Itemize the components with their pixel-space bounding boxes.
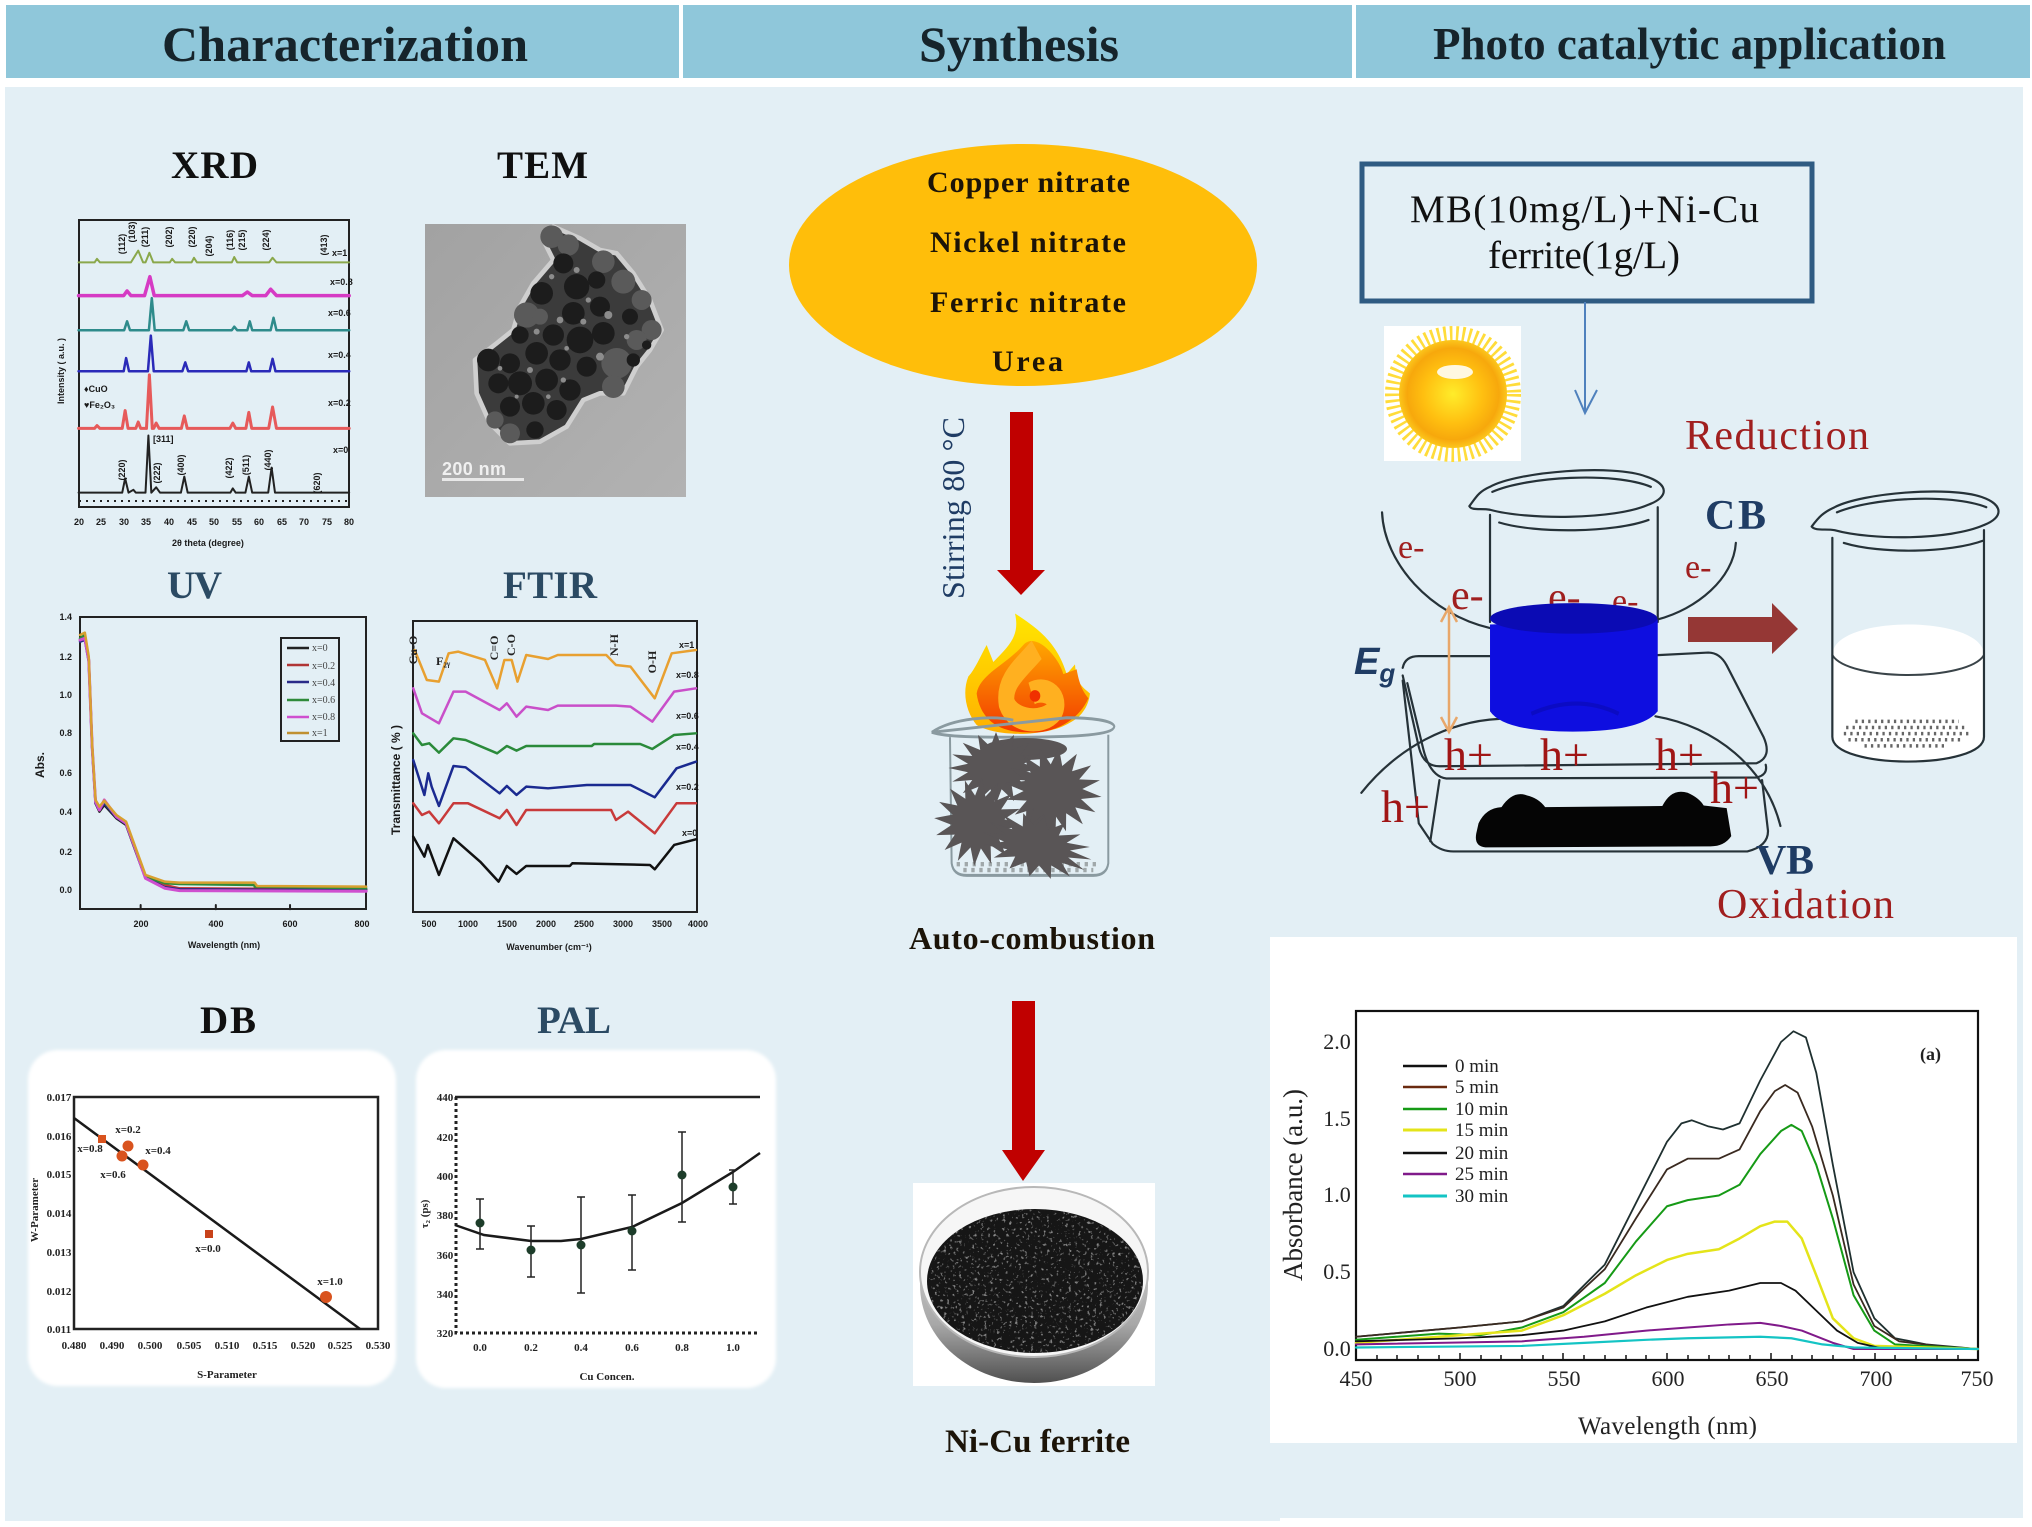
panel: photocatalytic application (1270, 164, 2017, 1443)
chart: positron lifetime: 380 (437, 1210, 454, 1222)
holes in valence band: h+ (1444, 729, 1493, 780)
chart: XRD patterns: [311] (153, 434, 174, 444)
electrons in conduction band: e- (1612, 583, 1638, 620)
chart: XRD patterns: 50 (209, 517, 219, 527)
chart: positron lifetime: 320 (437, 1328, 454, 1340)
chart: XRD patterns: x=0.6 (328, 308, 351, 318)
chart: UV absorbance: 1.4 (59, 612, 72, 622)
holes in valence band: h+ (1540, 729, 1589, 780)
chart: S-W parameter: x=0.0 (195, 1243, 221, 1255)
chart: S-W parameter: x=0.6 (100, 1169, 126, 1181)
chart: S-W parameter: 0.530 (366, 1340, 391, 1352)
legend: reaction time: 15 min (1455, 1120, 1509, 1141)
chart: XRD patterns: (511) (241, 455, 251, 475)
chart: XRD patterns: 25 (96, 517, 106, 527)
chart: XRD patterns: x=1 (332, 248, 347, 258)
chart: S-W parameter: x=1.0 (317, 1276, 343, 1288)
chart: UV absorbance: 0.2 (59, 847, 72, 857)
chart: XRD patterns: 75 (322, 517, 332, 527)
chart: XRD patterns: 40 (164, 517, 174, 527)
label: Eg: g (1378, 658, 1395, 688)
chart: UV absorbance: 1.0 (59, 690, 72, 700)
chart: XRD patterns: (116) (225, 230, 235, 250)
chart: XRD patterns: 45 (187, 517, 197, 527)
chart: positron lifetime (419, 1092, 760, 1383)
heading: PAL: PAL (537, 999, 611, 1042)
chart: XRD patterns: (220) (117, 459, 127, 481)
chart: XRD patterns (56, 220, 354, 548)
chart: FTIR transmittance: Cu-O (406, 636, 420, 664)
chart: S-W parameter: 0.505 (177, 1340, 202, 1352)
UV legend: x=0.2 (312, 661, 335, 672)
chart: positron lifetime: 440 (437, 1092, 454, 1104)
chart: FTIR transmittance: 4000 (688, 919, 708, 929)
chart: absorbance vs wavelength: 0.5 (1323, 1259, 1351, 1284)
chart: S-W parameter: 0.017 (47, 1092, 72, 1104)
chart: UV absorbance: 0.4 (59, 807, 72, 817)
legend: reaction time: 30 min (1455, 1186, 1509, 1207)
chart: positron lifetime: 360 (437, 1250, 454, 1262)
heading: FTIR: FTIR (503, 564, 598, 607)
holes in valence band: h+ (1710, 762, 1759, 813)
chart: positron lifetime: 0.6 (625, 1342, 639, 1354)
chart: XRD patterns: 55 (232, 517, 242, 527)
chart: UV absorbance: 400 (208, 919, 224, 929)
chart: XRD patterns: x=0 (333, 445, 348, 455)
legend: reaction time: 25 min (1455, 1164, 1509, 1185)
chart: positron lifetime: 0.2 (524, 1342, 538, 1354)
panel: absorbance spectra (1270, 937, 2017, 1443)
chart: FTIR transmittance: x=0.8 (676, 670, 699, 680)
blue solution (1490, 603, 1658, 732)
panel: PAL chart card (416, 1050, 776, 1388)
legend: reaction time (1403, 1056, 1509, 1207)
panel: DB chart card (28, 1050, 396, 1386)
electrons in conduction band: e- (1451, 573, 1484, 619)
legend: reaction time: 0 min (1455, 1056, 1499, 1077)
heading: TEM: TEM (497, 144, 588, 187)
chart: XRD patterns: (222) (152, 462, 162, 484)
chart: positron lifetime: 0.0 (473, 1342, 487, 1354)
chart: S-W parameter: W-Parameter (29, 1178, 41, 1242)
chart: positron lifetime: τ₂ (ps) (419, 1199, 431, 1228)
chart: FTIR transmittance: x=0 (682, 828, 697, 838)
chart: absorbance vs wavelength: (a) (1920, 1044, 1941, 1065)
arrow: mixture to reactor (1575, 302, 1597, 413)
chart: positron lifetime: 400 (437, 1171, 454, 1183)
chart: UV absorbance: 0.0 (59, 885, 72, 895)
chart: XRD patterns: (620) (312, 472, 322, 494)
chart: positron lifetime: 420 (437, 1132, 454, 1144)
chart: absorbance vs wavelength: 500 (1444, 1366, 1476, 1391)
heading: XRD: XRD (171, 144, 258, 187)
UV legend: x=0 (312, 643, 328, 654)
stirrer plate (1403, 653, 1768, 851)
chart: UV absorbance: 200 (133, 919, 149, 929)
holes in valence band: h+ (1381, 781, 1430, 832)
chart: S-W parameter: S-Parameter (197, 1369, 257, 1381)
panel: synthesis (789, 144, 1257, 1460)
chart: absorbance vs wavelength: 0.0 (1323, 1336, 1351, 1361)
chart: XRD patterns: Intensity ( a.u. ) (56, 338, 66, 404)
icon: sun (1384, 326, 1521, 461)
chart: XRD patterns: 35 (141, 517, 151, 527)
chart: absorbance vs wavelength: 600 (1652, 1366, 1684, 1391)
chart: XRD patterns: (211) (140, 227, 150, 247)
chart: S-W parameter: 0.011 (47, 1324, 71, 1336)
chart: absorbance vs wavelength: 700 (1860, 1366, 1892, 1391)
chart: absorbance vs wavelength: Wavelength (nm) (1578, 1413, 1757, 1440)
diagram: reactor on stirrer with CB and VB bands (1354, 470, 1814, 884)
chart: FTIR transmittance: C=O (487, 636, 501, 660)
chart: S-W parameter: 0.525 (328, 1340, 353, 1352)
chart: FTIR transmittance: N-H (607, 633, 621, 656)
chart: XRD patterns: 30 (119, 517, 129, 527)
chart: absorbance vs wavelength (1278, 1011, 1994, 1440)
chart: S-W parameter: 0.490 (100, 1340, 125, 1352)
chart: XRD patterns: (400) (176, 454, 186, 476)
chart: XRD patterns: x=0.4 (328, 350, 351, 360)
chart: S-W parameter: 0.013 (47, 1247, 72, 1259)
arrow: degradation result (1688, 603, 1798, 654)
chart: S-W parameter: 0.014 (47, 1208, 72, 1220)
UV legend: x=0.6 (312, 695, 335, 706)
chart: absorbance vs wavelength: Absorbance (a.u.) (1278, 1089, 1308, 1281)
chart: absorbance vs wavelength: 1.0 (1323, 1182, 1351, 1207)
chart: FTIR transmittance: O-H (645, 650, 659, 673)
heading: Photo catalytic application: Photo catalytic application (1433, 19, 1946, 69)
photo: Ni-Cu ferrite powder dish (913, 1183, 1155, 1386)
header bar (6, 5, 2030, 78)
chart: XRD patterns: 65 (277, 517, 287, 527)
label: Stirring 80 °C: Stirring 80 °C (935, 417, 971, 599)
chart: FTIR transmittance: C-O (504, 634, 518, 656)
precursor ellipse (789, 144, 1257, 386)
chart: S-W parameter: 0.510 (215, 1340, 240, 1352)
chart: FTIR transmittance: 3000 (613, 919, 633, 929)
chart: XRD patterns: 60 (254, 517, 264, 527)
chart: S-W parameter: 0.012 (47, 1286, 72, 1298)
chart: FTIR transmittance (389, 621, 708, 952)
chart: absorbance vs wavelength: 750 (1960, 1366, 1994, 1391)
chart: S-W parameter (29, 1092, 391, 1381)
chart: absorbance vs wavelength: 650 (1756, 1366, 1788, 1391)
chart: XRD patterns: (112) (117, 234, 127, 254)
chart: XRD patterns: (215) (237, 229, 247, 251)
chart: S-W parameter: 0.500 (138, 1340, 163, 1352)
CB band curves (1382, 512, 1736, 628)
chart: FTIR transmittance: 2000 (536, 919, 556, 929)
chart: UV absorbance: 0.8 (59, 728, 72, 738)
chart: FTIR transmittance: 1500 (497, 919, 517, 929)
chart: FTIR transmittance: x=0.6 (676, 711, 699, 721)
chart: XRD patterns: (202) (164, 226, 174, 248)
chart: XRD patterns: (440) (263, 449, 273, 471)
chart: FTIR transmittance: x=0.2 (676, 782, 699, 792)
chart: positron lifetime: 1.0 (726, 1342, 740, 1354)
chart: FTIR transmittance: Wavenumber (cm⁻¹) (506, 942, 592, 952)
chart: XRD patterns: (220) (187, 226, 197, 248)
UV legend: x=0.4 (312, 678, 335, 689)
holes in valence band (1381, 729, 1759, 832)
chart: S-W parameter: 0.480 (62, 1340, 87, 1352)
label: Ni-Cu ferrite: Ni-Cu ferrite (945, 1424, 1130, 1460)
chart: XRD patterns: ♦CuO (84, 384, 108, 394)
chart: S-W parameter: 0.515 (253, 1340, 278, 1352)
arrow: band gap (1441, 607, 1457, 732)
chart: XRD patterns: 20 (74, 517, 84, 527)
UV legend: x=0.8 (312, 712, 335, 723)
chart: S-W parameter: x=0.2 (115, 1124, 141, 1136)
chart: XRD patterns: 80 (344, 517, 354, 527)
chart: S-W parameter: x=0.8 (77, 1143, 103, 1155)
label: Eg: E (1354, 641, 1379, 683)
legend: reaction time: 20 min (1455, 1143, 1509, 1164)
chart: S-W parameter: x=0.4 (145, 1145, 171, 1157)
electrons in conduction band: e- (1398, 529, 1424, 566)
UV legend (281, 638, 339, 741)
chart: UV absorbance: Wavelength (nm) (188, 940, 260, 950)
icon: burning beaker (930, 613, 1114, 890)
panel: characterization (28, 144, 776, 1388)
chart: absorbance vs wavelength: 450 (1340, 1366, 1372, 1391)
chart: positron lifetime: 340 (437, 1289, 454, 1301)
precursor: Copper nitrate: Copper nitrate (927, 166, 1130, 199)
chart: XRD patterns: (224) (261, 229, 271, 251)
chart: FTIR transmittance: 500 (421, 919, 437, 929)
chart: UV absorbance: 1.2 (59, 652, 72, 662)
chart: XRD patterns: (103) (127, 221, 137, 243)
label: Oxidation: Oxidation (1717, 882, 1894, 928)
chart: absorbance vs wavelength: 550 (1548, 1366, 1580, 1391)
chart: FTIR transmittance: 2500 (574, 919, 594, 929)
UV legend: x=1 (312, 728, 328, 739)
chart: XRD patterns: (413) (319, 234, 329, 256)
label: Reduction: Reduction (1685, 413, 1869, 459)
label: VB: VB (1756, 838, 1814, 884)
chart: XRD patterns: x=0.2 (328, 398, 351, 408)
chart: positron lifetime: 0.8 (675, 1342, 689, 1354)
chart: FTIR transmittance: x=1 (679, 640, 694, 650)
heading: UV: UV (167, 564, 222, 607)
heading: Synthesis: Synthesis (919, 16, 1119, 72)
chart: absorbance vs wavelength: 1.5 (1323, 1106, 1351, 1131)
chart: S-W parameter: 0.015 (47, 1169, 72, 1181)
chart: UV absorbance: Abs. (33, 752, 47, 778)
precursor: Ferric nitrate: Ferric nitrate (930, 286, 1126, 319)
electrons in conduction band (1398, 529, 1711, 621)
chart: FTIR transmittance: F₂ᵧ (436, 654, 451, 668)
arrow: to Ni-Cu ferrite (1002, 1001, 1045, 1181)
chart: UV absorbance: 0.6 (59, 768, 72, 778)
chart: absorbance vs wavelength: 2.0 (1323, 1029, 1351, 1054)
chart: XRD patterns: ♥Fe₂O₃ (84, 400, 115, 410)
chart: UV absorbance: 800 (354, 919, 370, 929)
legend: reaction time: 10 min (1455, 1099, 1509, 1120)
TEM scale label: 200 nm (442, 459, 506, 479)
precursor: Nickel nitrate: Nickel nitrate (930, 226, 1126, 259)
electrons in conduction band: e- (1685, 549, 1711, 586)
legend: reaction time: 5 min (1455, 1077, 1499, 1098)
reaction mixture box: ferrite(1g/L) (1488, 234, 1680, 277)
precursor: Urea: Urea (992, 345, 1063, 378)
chart: FTIR transmittance: 3500 (652, 919, 672, 929)
beaker: clear solution (1812, 491, 1999, 762)
label: Auto-combustion: Auto-combustion (909, 920, 1155, 956)
chart: FTIR transmittance: x=0.4 (676, 742, 699, 752)
reaction mixture box: MB(10mg/L)+Ni-Cu (1410, 188, 1759, 231)
holes in valence band: h+ (1655, 729, 1704, 780)
chart: UV absorbance: 600 (282, 919, 298, 929)
chart: S-W parameter: 0.520 (291, 1340, 316, 1352)
reaction mixture box (1362, 164, 1812, 301)
heading: Characterization: Characterization (162, 16, 528, 72)
TEM micrograph (425, 224, 686, 497)
beaker with blue solution (1469, 470, 1664, 622)
arrow: stirring step (997, 412, 1045, 595)
chart: FTIR transmittance: 1000 (458, 919, 478, 929)
chart: positron lifetime: 0.4 (574, 1342, 588, 1354)
label: CB: CB (1705, 493, 1766, 539)
chart: XRD patterns: x=0.8 (330, 277, 353, 287)
chart: positron lifetime: Cu Concen. (579, 1371, 635, 1383)
VB band curve (1361, 716, 1780, 826)
chart: S-W parameter: 0.016 (47, 1131, 72, 1143)
heading: DB: DB (200, 999, 256, 1042)
chart: XRD patterns: (422) (224, 457, 234, 479)
chart: UV absorbance (33, 612, 370, 950)
chart: FTIR transmittance: Transmittance ( % ) (389, 725, 403, 835)
electrons in conduction band: e- (1548, 575, 1581, 621)
chart: XRD patterns: 70 (299, 517, 309, 527)
chart: XRD patterns: 2θ theta (degree) (172, 538, 244, 548)
chart: XRD patterns: (204) (204, 235, 214, 257)
